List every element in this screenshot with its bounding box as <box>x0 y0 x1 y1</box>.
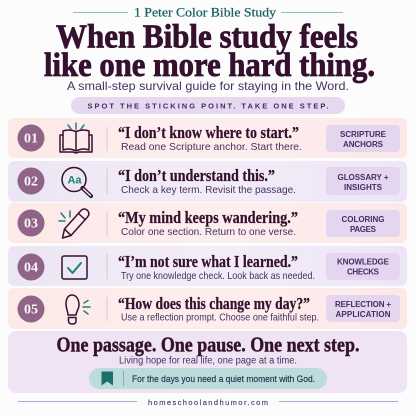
tag 3: PAGES <box>350 225 377 234</box>
callout pill: SPOT THE STICKING POINT. TAKE ONE STEP. <box>88 102 329 110</box>
action 3: Color one section. Return to one verse. <box>121 226 296 238</box>
footer website: homeschoolandhumor.com <box>148 398 268 407</box>
panel: row 2 <box>8 161 407 202</box>
title: When Bible study feels <box>56 18 358 56</box>
action 4: Try one knowledge check. Look back as needed. <box>121 270 315 282</box>
tag 1 <box>326 125 400 152</box>
icon: footprint <box>66 295 90 324</box>
number 01: 01 <box>24 132 38 146</box>
tag 5: REFLECTION + <box>335 300 391 309</box>
callout pill <box>71 97 345 114</box>
number 01 <box>18 124 44 152</box>
tag 3 <box>326 210 400 237</box>
title: like one more hard thing. <box>44 47 375 84</box>
header: series name: 1 Peter Color Bible Study <box>134 4 277 20</box>
panel: row 3 <box>8 203 407 243</box>
tag 1: ANCHORS <box>343 140 384 149</box>
panel: row 4 <box>8 246 407 286</box>
icon: magnifier: Aa <box>67 174 82 186</box>
closing subtext: Living hope for real life, one page at a time. <box>119 356 297 366</box>
number 03: 03 <box>24 216 38 232</box>
number 04: 04 <box>24 260 38 276</box>
number 05 <box>18 296 44 322</box>
tag 5: APPLICATION <box>336 310 391 319</box>
panel: row 1 <box>8 118 407 158</box>
quote 5: “How does this change my day?” <box>118 294 310 313</box>
quote 4: “I’m not sure what I learned.” <box>118 252 298 271</box>
action 1: Read one Scripture anchor. Start there. <box>121 141 302 153</box>
tag 2: INSIGHTS <box>344 183 383 192</box>
tag 1: SCRIPTURE <box>340 130 387 139</box>
tag 5 <box>326 295 400 322</box>
quote 2: “I don’t understand this.” <box>118 166 275 185</box>
tag 3: COLORING <box>342 215 384 224</box>
icon: checkbox <box>62 256 87 279</box>
number 05: 05 <box>24 302 38 318</box>
action 2: Check a key term. Revisit the passage. <box>121 184 296 196</box>
tag 4: KNOWLEDGE <box>337 258 390 266</box>
subtitle: A small-step survival guide for staying in the Word. <box>67 79 349 93</box>
quote 1: “I don’t know where to start.” <box>118 123 299 142</box>
icon: open book <box>60 123 92 153</box>
tag 2 <box>326 167 400 195</box>
closing headline: One passage. One pause. One next step. <box>56 332 360 356</box>
title <box>44 18 375 84</box>
number 04 <box>18 254 44 280</box>
icon: pencil <box>59 209 89 238</box>
teal note pill: For the days you need a quiet moment with God. <box>132 374 315 385</box>
panel: row 5 <box>8 288 407 329</box>
quote 3: “My mind keeps wandering.” <box>118 208 298 227</box>
number 03 <box>18 210 44 236</box>
number 02 <box>18 168 44 194</box>
action 5: Use a reflection prompt. Choose one faithful step. <box>121 312 319 324</box>
tag 4 <box>326 253 400 280</box>
tag 4: CHECKS <box>347 268 380 276</box>
tag 2: GLOSSARY + <box>338 173 389 182</box>
icon: magnifier <box>62 168 91 196</box>
panel: closing message <box>8 331 407 393</box>
teal note pill <box>89 368 327 389</box>
icon: bookmark <box>102 372 113 386</box>
number 02: 02 <box>24 174 38 190</box>
